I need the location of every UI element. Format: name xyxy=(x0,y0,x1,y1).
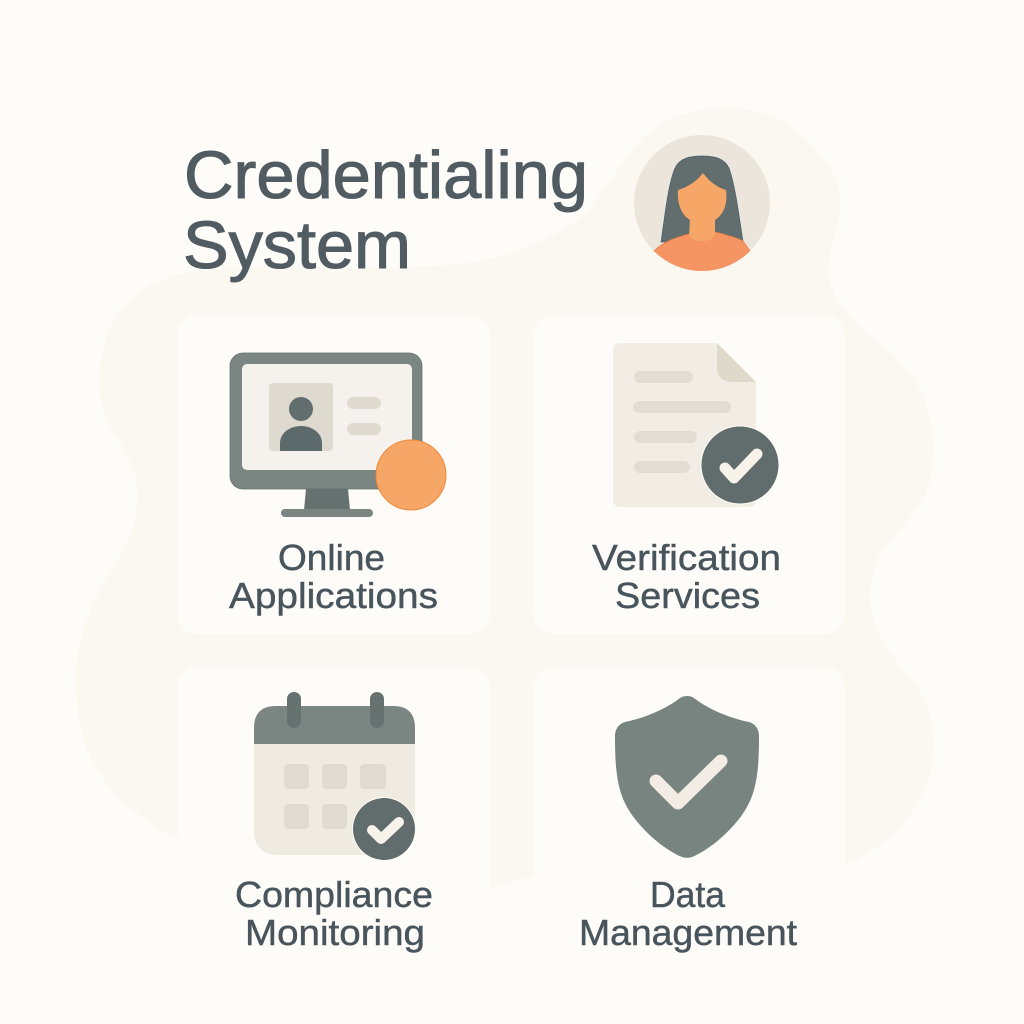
label: compliance monitoring: Compliance xyxy=(235,874,433,915)
label: compliance monitoring: Monitoring xyxy=(245,912,425,953)
icon: avatar xyxy=(634,135,770,280)
label: data management: Management xyxy=(579,912,797,953)
panel: compliance monitoring xyxy=(177,667,490,971)
label: data management: Data xyxy=(650,874,726,915)
label: verification services: Verification xyxy=(592,537,781,578)
title: System xyxy=(183,208,411,283)
card background xyxy=(177,667,490,971)
icon: document with check xyxy=(613,343,780,507)
label: data management xyxy=(579,874,797,953)
card background xyxy=(533,315,845,634)
title xyxy=(183,138,588,283)
title: Credentialing xyxy=(184,138,588,213)
label: verification services: Services xyxy=(615,575,760,616)
label: compliance monitoring xyxy=(235,874,433,953)
panel: verification services xyxy=(533,315,845,634)
panel: data management xyxy=(533,667,845,971)
card background xyxy=(177,315,490,634)
icon: monitor xyxy=(230,353,446,517)
icon: shield with check xyxy=(615,696,759,858)
card background xyxy=(533,667,845,971)
label: online applications: Applications xyxy=(229,575,438,616)
label: verification services xyxy=(592,537,781,616)
background blob xyxy=(76,108,933,888)
label: online applications: Online xyxy=(278,537,385,578)
icon: calendar with check xyxy=(254,692,416,861)
panel: online applications xyxy=(177,315,490,634)
label: online applications xyxy=(229,537,438,616)
